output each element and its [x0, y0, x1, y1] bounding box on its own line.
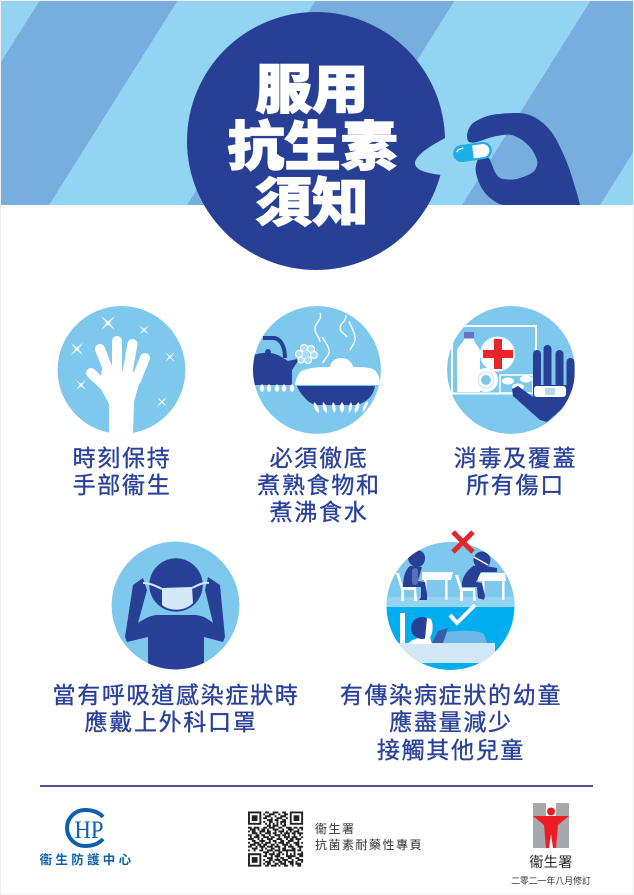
- caption: 所有傷口: [466, 472, 565, 498]
- panel: children with symptoms reduce contact: [340, 532, 562, 763]
- title: [228, 61, 398, 233]
- icon: clean hand: [58, 306, 186, 434]
- logo: Centre for Health Protection: HP: [74, 817, 104, 844]
- header striped band: [0, 0, 634, 205]
- icon: first aid kit and bandaged hand: [447, 306, 575, 434]
- panel: cover wounds: [447, 306, 577, 498]
- logo: Centre for Health Protection: [40, 810, 134, 867]
- capsule: [452, 141, 493, 163]
- panel: wear surgical mask: [52, 542, 300, 735]
- title: 抗生素: [228, 118, 398, 177]
- caption: 接觸其他兒童: [377, 737, 525, 763]
- icon: person putting on mask: [112, 542, 240, 671]
- caption: 當有呼吸道感染症狀時: [52, 682, 300, 708]
- icon: kettle and pot on flames: [250, 306, 381, 434]
- caption: 時刻保持: [73, 445, 171, 471]
- logo: Department of Health: [511, 803, 591, 886]
- QR code: [248, 812, 303, 867]
- caption: 煮熟食物和: [257, 472, 381, 498]
- caption: 手部衞生: [73, 472, 171, 498]
- logo: Department of Health: 衞生署: [529, 854, 573, 870]
- upper scene: [396, 572, 506, 601]
- panel: cook food thoroughly: [250, 306, 381, 525]
- head circle: [187, 12, 445, 270]
- caption: 必須徹底: [270, 445, 368, 471]
- hand: [467, 113, 580, 205]
- icon: red cross mark: [453, 532, 473, 552]
- icon: children at desks and child in bed: [386, 542, 516, 671]
- title: 服用: [256, 61, 368, 120]
- caption: 有傳染病症狀的幼童: [340, 682, 562, 708]
- caption: 應盡量減少: [389, 709, 513, 735]
- mouth notch: [415, 137, 452, 175]
- caption: 消毒及覆蓋: [454, 445, 577, 471]
- logo: Department of Health: 二零二一年八月修訂: [511, 875, 591, 886]
- caption: 煮沸食水: [270, 499, 368, 525]
- head silhouette with title: [187, 12, 452, 270]
- QR caption: 抗菌素耐藥性專頁: [315, 837, 423, 852]
- QR caption: 衞生署: [315, 822, 356, 836]
- caption: 應戴上外科口罩: [85, 709, 257, 735]
- panel: hand hygiene: [58, 306, 186, 498]
- logo: Centre for Health Protection: 衞生防護中心: [40, 852, 134, 867]
- lower scene: [400, 613, 405, 643]
- icon: hand holding capsule: [452, 113, 580, 205]
- title: 須知: [256, 174, 368, 233]
